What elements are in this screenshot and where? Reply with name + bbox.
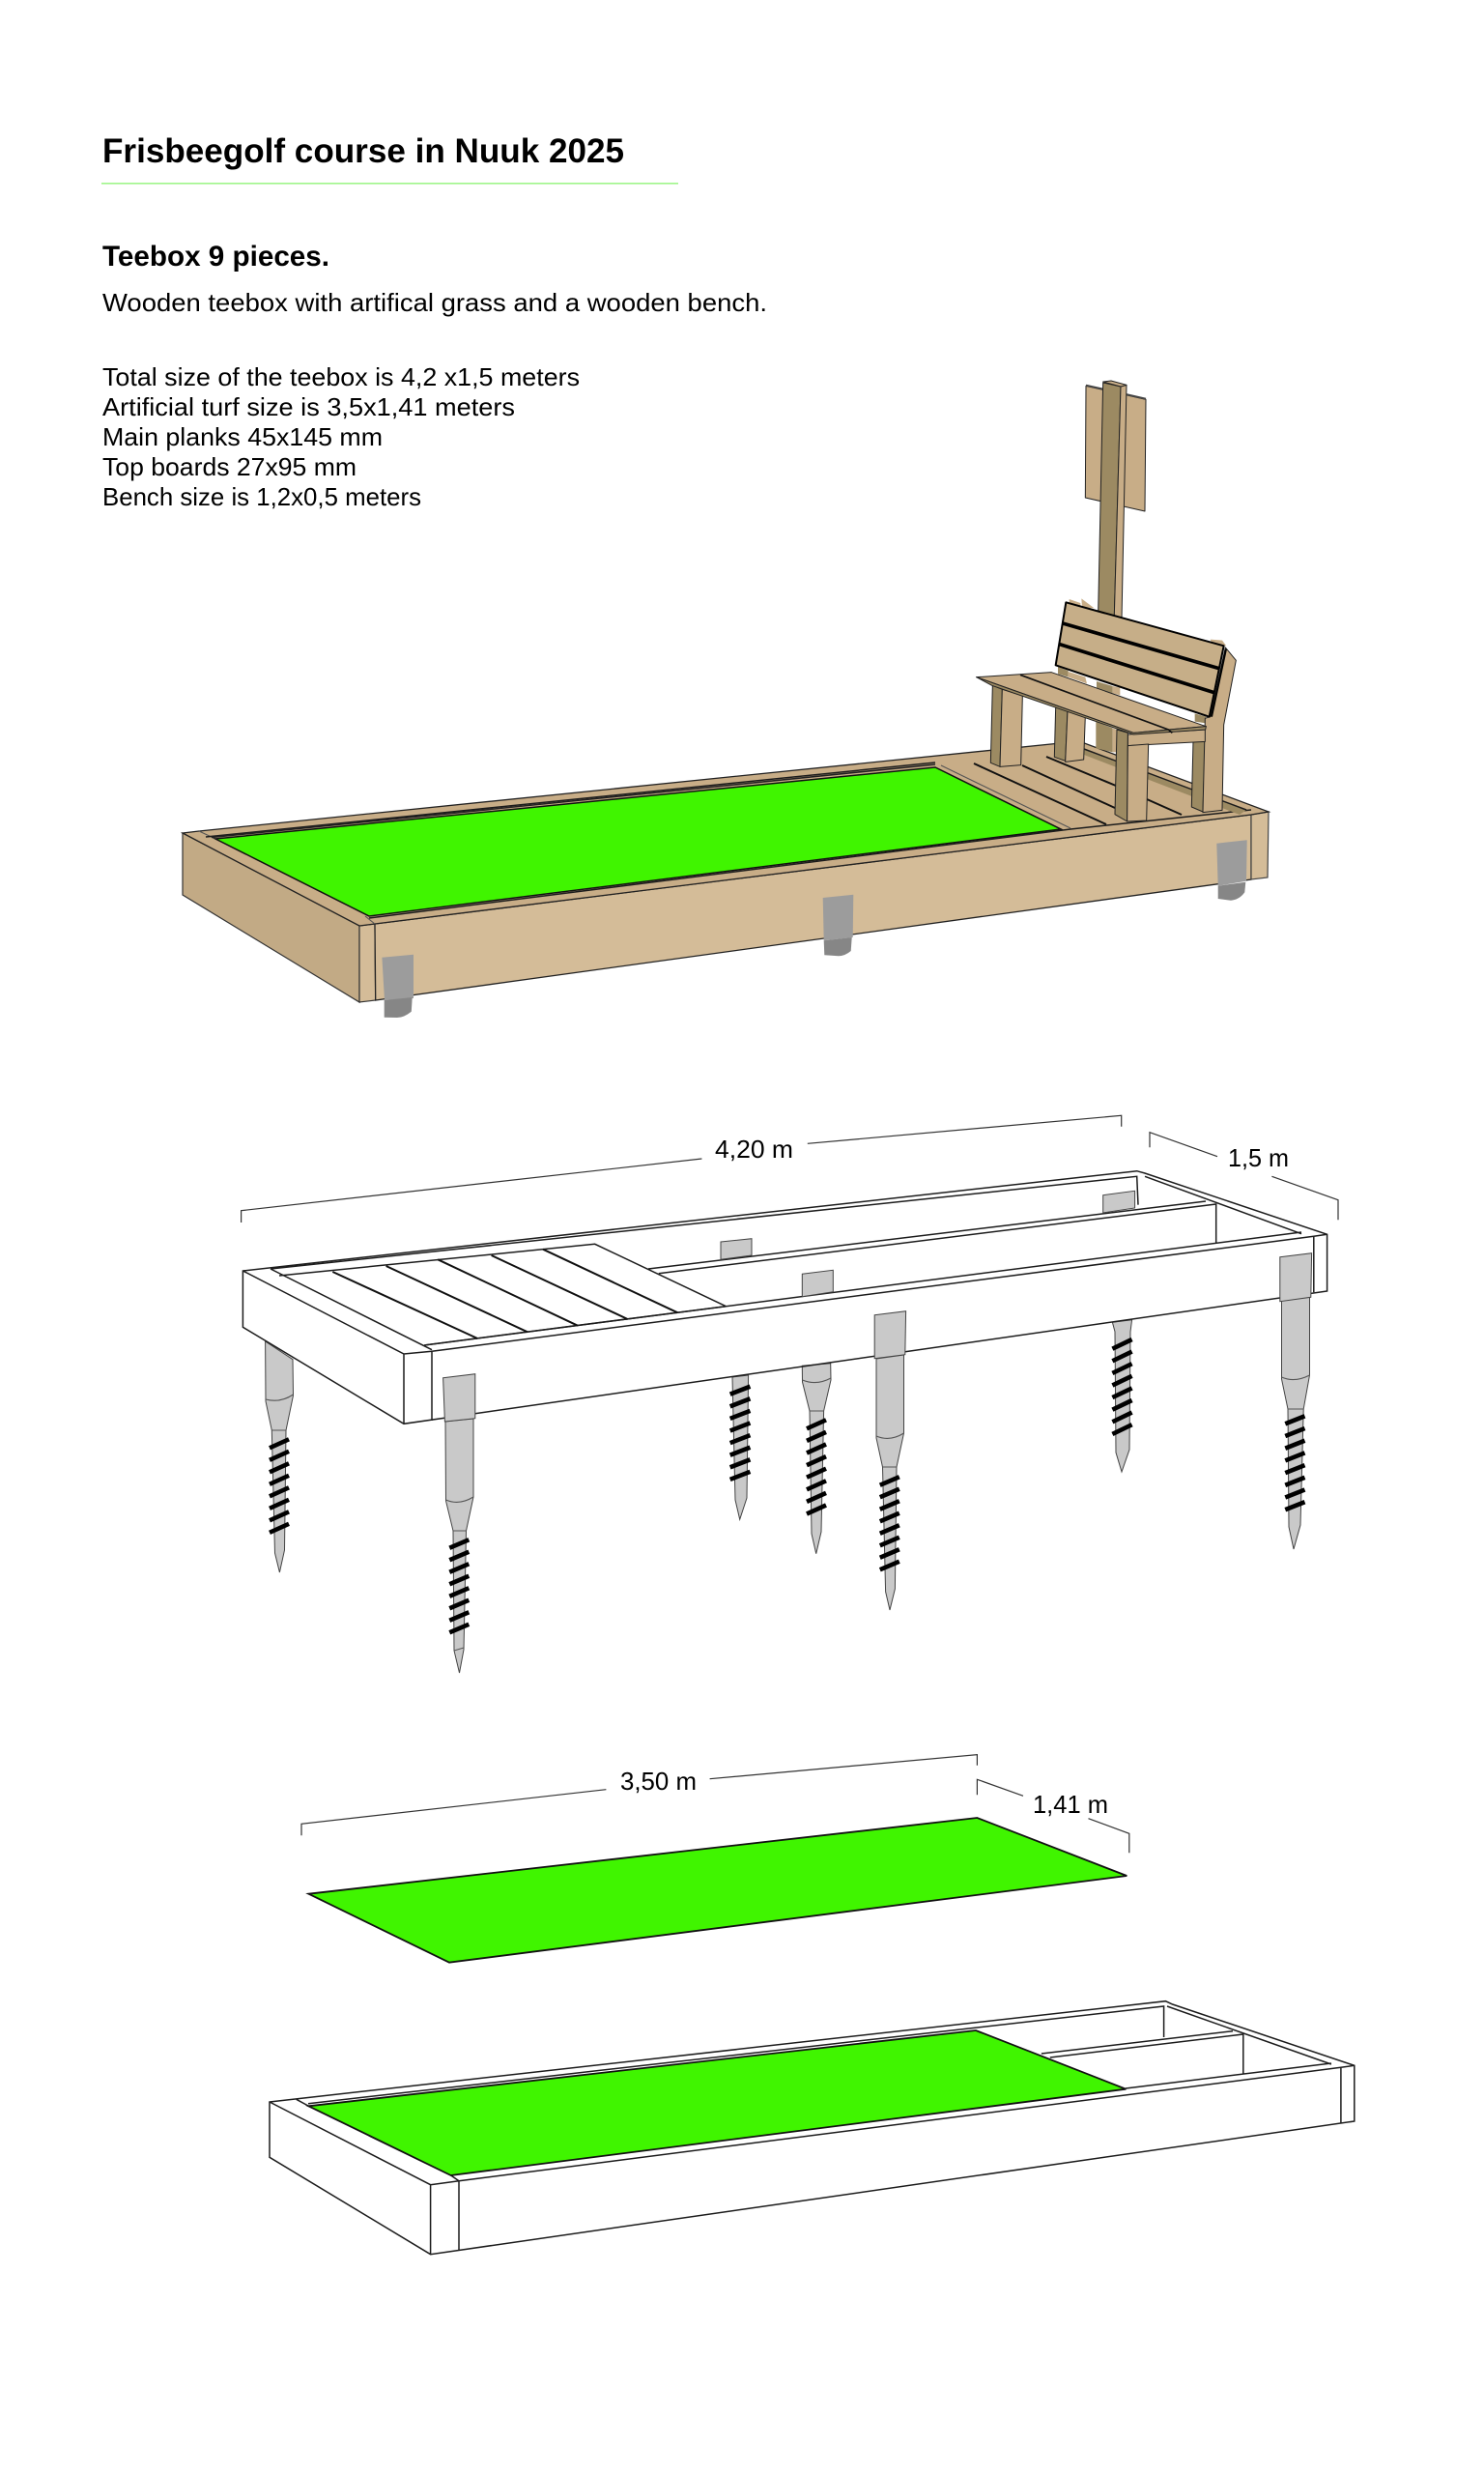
dimension: width 1,5 m xyxy=(1150,1133,1338,1220)
bench left leg xyxy=(990,685,1022,766)
turf in frame xyxy=(308,2030,1126,2175)
illustration: wooden frame with screw anchors xyxy=(242,1115,1338,1673)
dimension: length 4,20 m xyxy=(242,1115,1122,1223)
screw anchor: middle xyxy=(802,1364,831,1554)
subheading: Teebox 9 pieces. xyxy=(102,241,329,273)
specifications text block: Main planks 45x145 mm xyxy=(102,422,383,451)
sign post and bench xyxy=(977,381,1236,821)
artificial turf xyxy=(215,767,1061,916)
illustration: coloured teebox with bench xyxy=(183,381,1269,1018)
screw anchor: front right xyxy=(1280,1253,1312,1549)
specifications text block: Top boards 27x95 mm xyxy=(102,452,357,481)
bench front right leg xyxy=(1115,730,1149,821)
bench backrest xyxy=(1056,602,1226,717)
frame wireframe xyxy=(243,1171,1327,1424)
illustration: artificial turf sheet xyxy=(301,1755,1129,1963)
screw anchor: far right rear xyxy=(1112,1320,1132,1472)
title underline xyxy=(101,183,678,185)
frame outline xyxy=(270,2001,1355,2255)
top boards xyxy=(279,1244,726,1345)
screw anchor: front middle xyxy=(874,1311,906,1610)
specifications text block xyxy=(102,362,580,511)
rail and top board lines xyxy=(206,749,1251,918)
title: Frisbeegolf course in Nuuk 2025 xyxy=(102,132,624,170)
dimension: width 1,41 m: 1,41 m xyxy=(1033,1790,1108,1819)
dimension: width 1,41 m xyxy=(977,1779,1129,1853)
screw anchor: front left xyxy=(443,1374,475,1673)
ground anchors visible on the frame xyxy=(382,840,1247,1018)
bench rear supports xyxy=(1058,598,1226,723)
description: Wooden teebox with artifical grass and a wooden bench. xyxy=(102,288,767,317)
dimension: length 3,50 m xyxy=(301,1755,977,1835)
sign panel xyxy=(1085,386,1146,511)
illustration: frame with turf laid in xyxy=(270,2001,1355,2255)
sign post xyxy=(1096,381,1127,752)
specifications text block: Artificial turf size is 3,5x1,41 meters xyxy=(102,392,515,421)
dimension: length 4,20 m: 4,20 m xyxy=(715,1135,793,1164)
bench middle leg xyxy=(1054,707,1085,762)
specifications text block: Bench size is 1,2x0,5 meters xyxy=(102,482,421,511)
rear screw anchors xyxy=(266,1320,1132,1572)
bench right rear leg and upright xyxy=(1191,647,1236,813)
specifications text block: Total size of the teebox is 4,2 x1,5 meters xyxy=(102,362,580,391)
screw anchor: rear centre xyxy=(730,1375,750,1519)
dimension: length 3,50 m: 3,50 m xyxy=(620,1767,697,1796)
teebox wooden frame xyxy=(183,741,1269,1002)
dimension: width 1,5 m: 1,5 m xyxy=(1228,1143,1289,1172)
bench seat xyxy=(977,673,1206,746)
front screw anchors xyxy=(443,1253,1312,1673)
inner plates of rear anchors xyxy=(721,1191,1135,1297)
screw anchor: rear left xyxy=(266,1341,294,1572)
turf sheet xyxy=(308,1818,1127,1963)
